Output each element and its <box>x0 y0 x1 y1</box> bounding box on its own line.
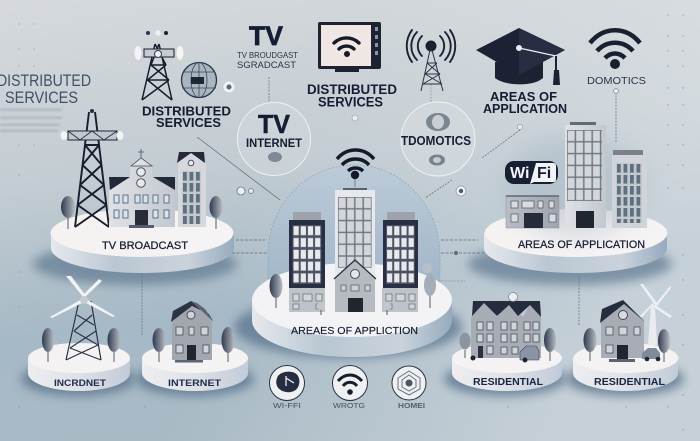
centre tower <box>335 188 375 295</box>
side heading placeholder text lines <box>0 109 62 132</box>
panel: central application hub <box>234 150 462 358</box>
label: INTERNET <box>168 378 221 389</box>
left tower <box>289 212 325 312</box>
trees <box>61 196 222 229</box>
tall side building <box>177 152 206 227</box>
icon: wi-fi badge circle: WI-FFI <box>273 401 301 410</box>
panel: internet tower platform <box>21 276 135 396</box>
connector lines <box>142 77 616 335</box>
wi-fi badge: Wi <box>510 165 529 182</box>
label: AREAS OF APPLICATION <box>518 239 645 251</box>
heading: distributed services centre <box>307 82 397 110</box>
small connector nodes <box>224 82 618 255</box>
heading: tv broadcast: SGRADCAST <box>237 60 297 70</box>
side heading: distributed services: DISTRIBUTED <box>0 71 91 90</box>
icon: antenna tower <box>407 30 455 91</box>
heading: tv broadcast: TV <box>249 21 283 51</box>
trees <box>152 327 234 362</box>
icon: wifi circle <box>332 366 368 410</box>
panel: internet house platform <box>136 301 254 396</box>
centre house <box>334 260 376 312</box>
panel: tv broadcast platform <box>33 109 237 285</box>
icon: wi-fi badge circle <box>270 366 304 410</box>
callout circle: tv internet <box>238 102 310 176</box>
wind turbine <box>639 284 672 345</box>
icon: wifi circle: WROTG <box>333 401 365 410</box>
heading: areas of application <box>483 90 567 116</box>
label: AREAES OF APPLICTION <box>291 325 418 337</box>
icon: home circle: HOMEI <box>398 401 425 410</box>
heading: areas of application: AREAS OF <box>490 90 557 104</box>
heading: tv broadcast <box>237 21 298 70</box>
label: RESIDENTIAL <box>473 377 543 388</box>
buildings glow <box>505 135 645 235</box>
label: TV BROADCAST <box>102 240 188 252</box>
icon: monitor with wifi <box>318 22 381 72</box>
right tower <box>382 212 418 312</box>
low building <box>506 196 559 228</box>
tall building <box>565 122 606 228</box>
heading: distributed services centre: DISTRIBUTED <box>307 82 397 97</box>
trees <box>42 328 120 362</box>
icon: home circle <box>392 366 426 410</box>
heading: distributed services: DISTRIBUTED <box>142 104 231 118</box>
label: RESIDENTIAL <box>594 377 665 388</box>
side heading: distributed services <box>0 71 91 107</box>
heading: tv broadcast: TV BROUDGAST <box>237 50 298 60</box>
heading: distributed services centre: SERVICES <box>318 94 383 110</box>
centre wifi <box>337 150 374 187</box>
side building <box>612 150 647 228</box>
trees <box>270 263 436 315</box>
car <box>470 346 539 362</box>
icon: wifi top right <box>590 30 640 69</box>
panel: residential terrace platform <box>444 292 566 396</box>
house <box>171 301 213 362</box>
callout circle: domotics <box>401 102 475 176</box>
callout circle: domotics: TDOMOTICS <box>401 134 471 148</box>
icon: graduation cap <box>476 28 565 85</box>
wi-fi badge <box>505 161 558 184</box>
house <box>600 300 645 362</box>
panel: residential house platform <box>566 284 684 396</box>
heading: areas of application: APPLICATION <box>483 102 567 116</box>
icon: small tower with globe <box>134 30 216 100</box>
tower <box>60 109 124 227</box>
callout circle: tv internet: INTERNET <box>246 138 302 150</box>
callout circle: tv internet: TV <box>258 109 291 139</box>
terraced houses <box>471 292 541 358</box>
heading: distributed services: SERVICES <box>156 115 221 130</box>
label: domotics: DOMOTICS <box>587 75 646 87</box>
school building <box>109 149 175 228</box>
wind tower <box>50 276 115 360</box>
dome <box>268 165 440 300</box>
label: INCRDNET <box>54 378 106 389</box>
trees <box>584 328 670 362</box>
wi-fi badge: Fi <box>537 165 551 182</box>
side heading: distributed services: SERVICES <box>5 88 78 107</box>
car <box>642 348 660 361</box>
heading: distributed services <box>142 104 231 130</box>
panel: areas of application platform right <box>468 122 672 285</box>
trees <box>460 328 556 361</box>
